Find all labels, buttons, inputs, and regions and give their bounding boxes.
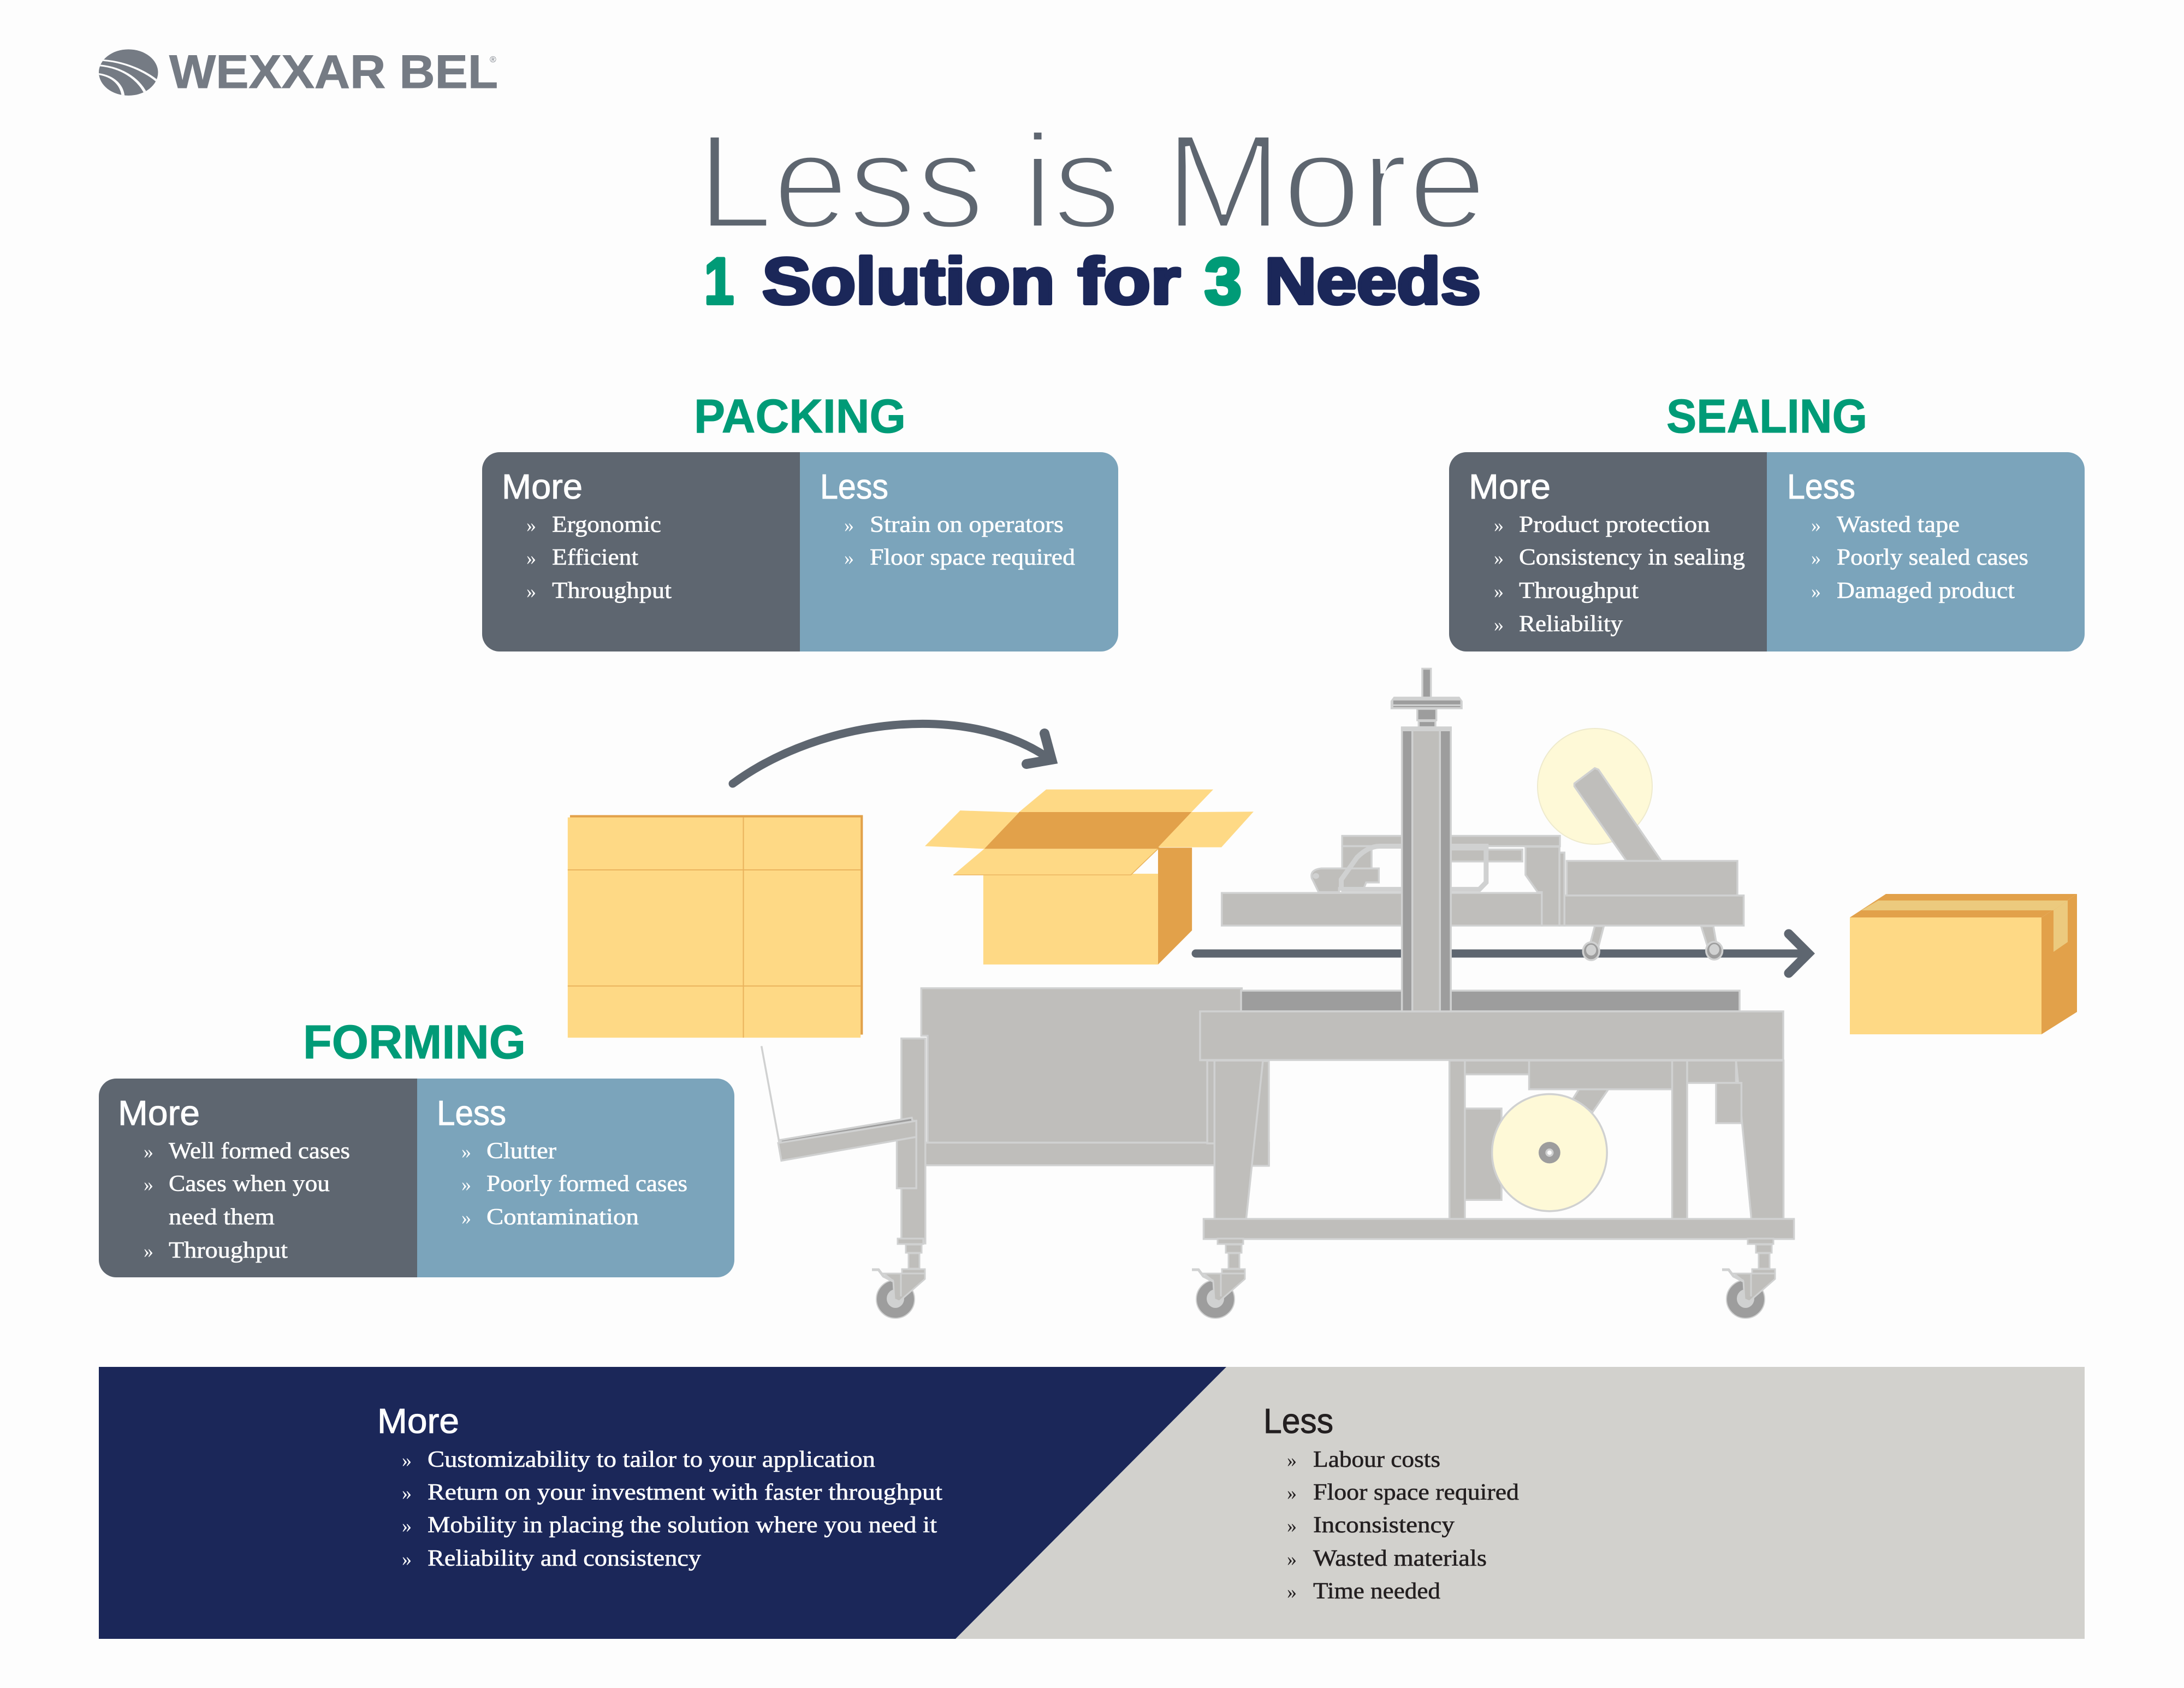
panel: sealing: Throughput [1519, 578, 1639, 603]
panel: packing: » [526, 547, 536, 569]
panel: forming: » [461, 1207, 471, 1229]
panel: sealing: » [1811, 581, 1821, 602]
logo: Wexxar Bel [99, 49, 497, 96]
panel: forming: need them [169, 1205, 275, 1230]
panel: forming: Throughput [169, 1238, 288, 1263]
machine: sealing head [1222, 768, 1744, 960]
title [697, 106, 1487, 257]
list: more: » [402, 1548, 412, 1570]
subtitle: 1 [704, 245, 734, 318]
panel: sealing [1449, 452, 2085, 651]
subtitle: for [1078, 245, 1180, 318]
subtitle [704, 245, 1481, 318]
machine: table top [1200, 1011, 1783, 1060]
list: more: Mobility in placing the solution where you need it [428, 1513, 937, 1538]
panel: forming: » [144, 1141, 153, 1163]
panel: forming: More [118, 1093, 200, 1133]
panel: sealing: More [1469, 467, 1551, 506]
panel: packing: More [502, 467, 583, 506]
list: less: Inconsistency [1313, 1513, 1455, 1538]
list: less: Time needed [1313, 1579, 1440, 1604]
arrow: straight, conveyor direction [1196, 934, 1808, 973]
list: more: » [402, 1449, 412, 1471]
case blank (flat cardboard) [568, 815, 863, 1038]
panel: packing: Strain on operators [870, 512, 1064, 537]
panel: packing: » [526, 581, 536, 602]
icon: logo mark [97, 49, 159, 97]
list: more [377, 1401, 942, 1571]
list: less: » [1287, 1581, 1297, 1603]
list: more: Return on your investment with faster throughput [428, 1480, 942, 1505]
panel: forming: » [144, 1240, 153, 1262]
panel: forming: » [461, 1174, 471, 1195]
panel: sealing: Damaged product [1837, 578, 2015, 603]
panel: forming: Cases when you [169, 1171, 330, 1197]
panel: packing: Throughput [552, 578, 672, 603]
title: More [1165, 106, 1487, 257]
list: less [1263, 1401, 1519, 1604]
heading: forming: FORMING [303, 1016, 526, 1069]
panel: packing: » [526, 514, 536, 536]
title: Less [697, 106, 984, 257]
logo registered mark: ® [490, 55, 496, 64]
heading: sealing: SEALING [1666, 390, 1867, 443]
logo wordmark: WEXXAR BEL [169, 46, 498, 98]
list: more: » [402, 1482, 412, 1504]
panel: packing: Efficient [552, 545, 638, 570]
panel: sealing: Poorly sealed cases [1837, 545, 2028, 570]
panel: forming: Well formed cases [169, 1139, 350, 1164]
list: less: Less [1263, 1401, 1333, 1441]
subtitle: Needs [1265, 245, 1481, 318]
machine: central column [1392, 668, 1462, 1011]
casters [872, 1239, 1775, 1318]
panel: packing: Less [820, 467, 888, 506]
panel: packing: » [844, 547, 854, 569]
panel: sealing: Consistency in sealing [1519, 545, 1745, 570]
list: less: » [1287, 1548, 1297, 1570]
tape roll: upper [1538, 728, 1652, 844]
sealed case [1850, 894, 2077, 1034]
list: less: Labour costs [1313, 1447, 1440, 1472]
panel: sealing: Product protection [1519, 512, 1710, 537]
panel: forming: Less [437, 1093, 506, 1133]
panel: sealing: » [1811, 514, 1821, 536]
list: more: Customizability to tailor to your application [428, 1447, 875, 1472]
panel: forming [99, 1079, 734, 1277]
panel: sealing: » [1494, 514, 1504, 536]
list: more: More [377, 1401, 459, 1441]
panel: sealing: Wasted tape [1837, 512, 1960, 537]
list: more: Reliability and consistency [428, 1546, 701, 1571]
panel: packing: » [844, 514, 854, 536]
heading: packing: PACKING [694, 390, 906, 443]
machine: case former and sealer [762, 668, 1794, 1318]
machine: forming section [762, 988, 1269, 1243]
subtitle: Solution [762, 245, 1055, 318]
open case with flaps [925, 790, 1254, 964]
list: less: » [1287, 1449, 1297, 1471]
list: less: Wasted materials [1313, 1546, 1487, 1571]
list: less: Floor space required [1313, 1480, 1519, 1505]
banner: more background [99, 1367, 1226, 1639]
tape roll: lower [1492, 1094, 1607, 1211]
panel: sealing: Less [1787, 467, 1855, 506]
panel: sealing: Reliability [1519, 612, 1623, 637]
list: more: » [402, 1515, 412, 1537]
panel: packing: Floor space required [870, 545, 1075, 570]
panel: sealing: » [1494, 614, 1504, 636]
banner: overall more and less [99, 1367, 2085, 1639]
machine: dark rear rail [1241, 991, 1740, 1011]
machine: under-table frame [1203, 1061, 1794, 1239]
panel: packing [482, 452, 1118, 651]
subtitle: 3 [1204, 245, 1242, 318]
list: less: » [1287, 1482, 1297, 1504]
arrow: curved, blank to open case [733, 724, 1052, 784]
panel: sealing: » [1811, 547, 1821, 569]
panel: forming: Clutter [486, 1139, 556, 1164]
panel: forming: » [144, 1174, 153, 1195]
banner: less background [99, 1367, 2085, 1639]
panel: forming: » [461, 1141, 471, 1163]
panel: packing: Ergonomic [552, 512, 661, 537]
list: less: » [1287, 1515, 1297, 1537]
panel: forming: Contamination [486, 1205, 639, 1230]
panel: forming: Poorly formed cases [486, 1171, 687, 1197]
title: is [1023, 106, 1121, 257]
panel: sealing: » [1494, 547, 1504, 569]
panel: sealing: » [1494, 581, 1504, 602]
